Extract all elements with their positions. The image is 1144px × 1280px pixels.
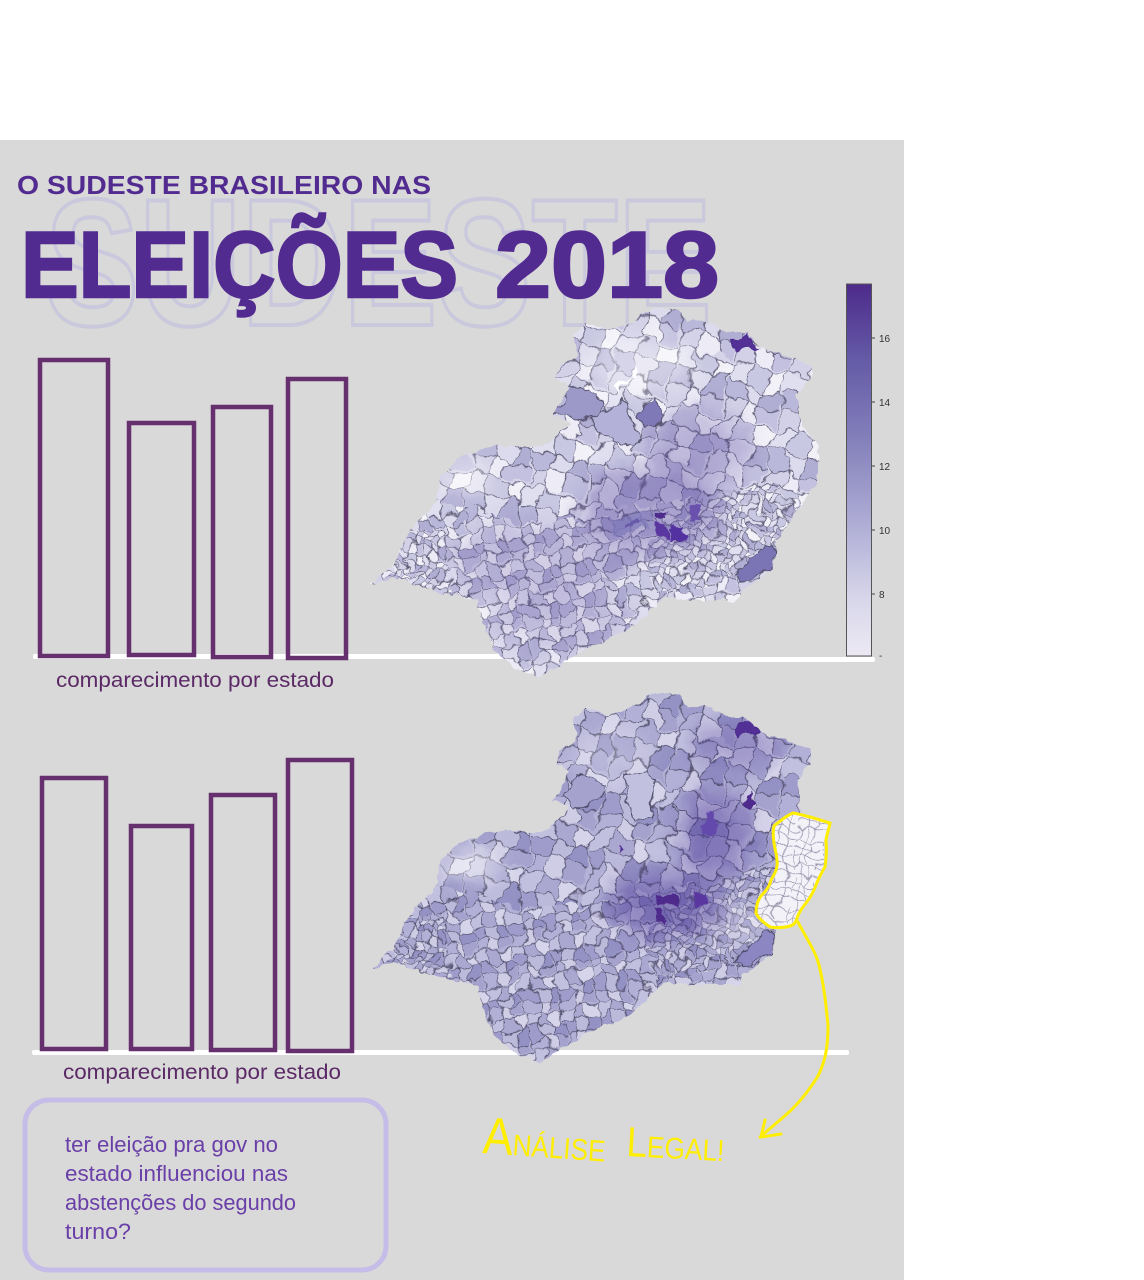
upper chart caption: comparecimento por estado xyxy=(56,669,334,692)
colorbar, upper: 12 xyxy=(879,462,891,473)
handwritten note: ANÁLISE xyxy=(481,1107,608,1174)
yellow arrow to note xyxy=(760,922,828,1137)
colorbar, upper: 16 xyxy=(879,334,891,345)
grey poster background xyxy=(0,140,904,1280)
callout: question: turno? xyxy=(65,1219,131,1244)
callout: question: estado influenciou nas xyxy=(65,1161,288,1186)
callout: question xyxy=(25,1100,386,1270)
handwritten note: LEGAL! xyxy=(626,1118,726,1170)
lower chart caption: comparecimento por estado xyxy=(63,1061,341,1084)
main title: ELEIÇÕES xyxy=(21,212,458,317)
colorbar, upper: 10 xyxy=(879,526,891,537)
colorbar, upper xyxy=(846,284,891,662)
main title xyxy=(21,212,719,317)
ghost outlined word SUDESTE: SUDESTE xyxy=(45,162,712,364)
choropleth map, lower xyxy=(371,692,828,1064)
white highlighted Espírito Santo area xyxy=(758,814,828,926)
subtitle: O SUDESTE BRASILEIRO NAS xyxy=(17,170,431,200)
choropleth map, upper xyxy=(370,307,820,678)
main title: 2018 xyxy=(495,212,719,317)
bar chart: turnout by state, lower xyxy=(42,760,352,1051)
colorbar, upper: 14 xyxy=(879,398,891,409)
baseline, upper chart xyxy=(33,654,875,662)
infographic canvas xyxy=(0,140,904,1280)
bar chart: turnout by state, upper xyxy=(40,360,346,658)
colorbar, upper: 8 xyxy=(879,590,885,601)
callout: question: ter eleição pra gov no xyxy=(65,1132,278,1157)
handwritten note xyxy=(481,1107,726,1174)
colorbar, upper: - xyxy=(879,651,882,662)
callout: question: abstenções do segundo xyxy=(65,1190,296,1215)
yellow outline around highlighted area xyxy=(756,813,830,928)
baseline, lower chart xyxy=(32,1050,849,1055)
